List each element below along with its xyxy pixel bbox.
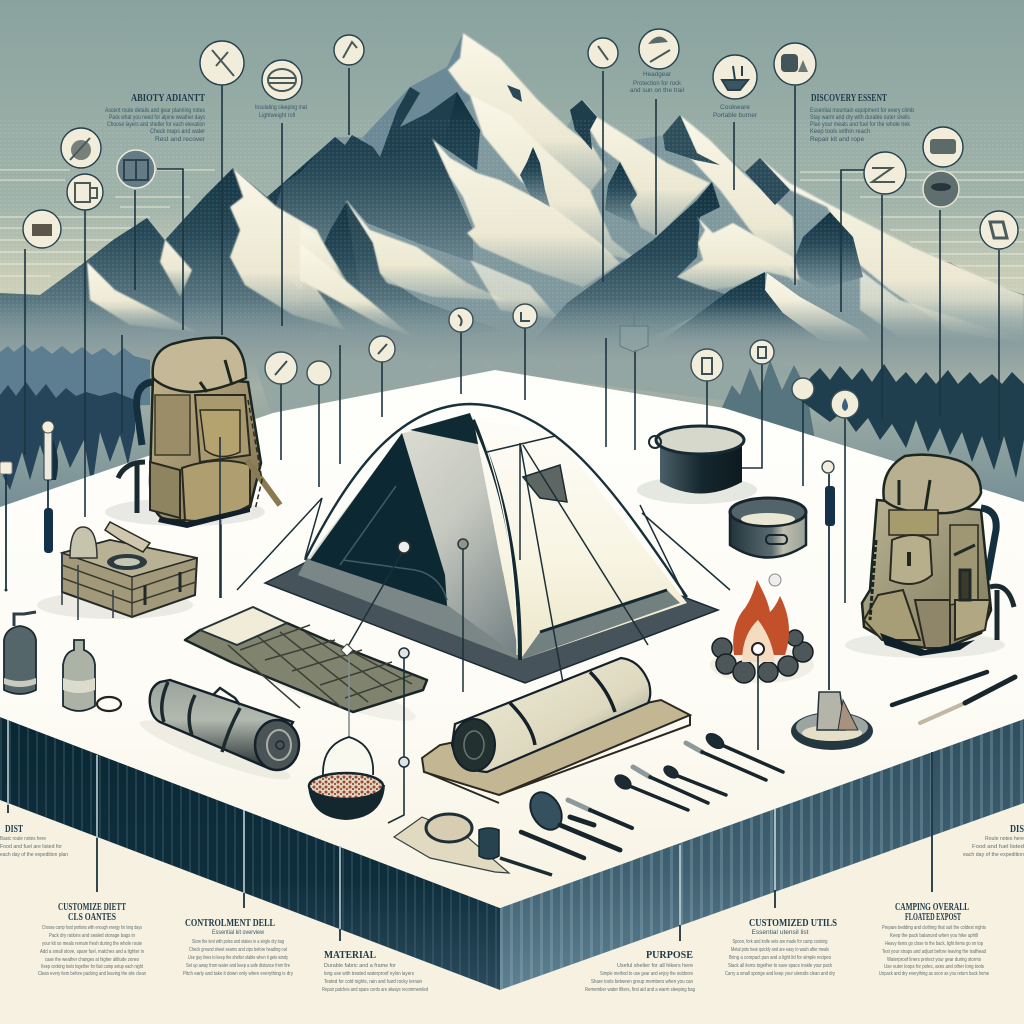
bottom text: material block: Durable fabric and a frame for	[324, 963, 396, 969]
bottom text: far right	[963, 824, 1024, 858]
mess tray	[791, 692, 873, 750]
top left text block: ABIOTY ADIANTT	[131, 93, 205, 104]
bottom text: customize block: case the weather changes at higher altitude zones	[45, 957, 139, 963]
bottom text: material block: Repair patches and spare cords are always recommended	[322, 987, 428, 993]
bottom text: utensils block: Bring a compact pan and a light lid for simple recipes	[729, 955, 831, 961]
bottom text: cookware block: CONTROLMENT DELL	[185, 918, 275, 929]
bottom text: customize block: Keep cooking tools together for fast camp setup each night	[41, 964, 143, 970]
pale trees right	[720, 360, 815, 440]
top right text block: Plan your meals and fuel for the whole trek	[810, 122, 911, 128]
bottom text: right block: Use outer loops for poles, axes and other long tools	[884, 964, 984, 970]
bottom text: right block: Prepare bedding and clothing that suit the coldest nights	[882, 925, 986, 931]
far right snow	[760, 158, 1024, 345]
horizon streaks	[0, 170, 1024, 278]
bottom text: material block	[322, 950, 428, 993]
bottom text: right block	[879, 902, 989, 977]
tent	[237, 404, 730, 692]
bottom text: far left: each day of the expedition plan	[0, 852, 68, 858]
bottom text: cookware block: Store the tent with poles and stakes in a single dry bag	[192, 939, 284, 945]
mat label: Lightweight roll	[259, 113, 295, 119]
fuel bottle	[4, 612, 36, 694]
bottom text: purpose block: PURPOSE	[646, 950, 693, 961]
bottom text: right block: Unpack and dry everything as soon as you return back home	[879, 971, 989, 977]
backpack left	[105, 338, 280, 598]
top left text block: Choose layers and shelter for each elevation	[107, 122, 205, 128]
bottom text: far left: Basic route notes here	[0, 836, 46, 842]
bottom text: utensils block: Carry a small sponge and keep your utensils clean and dry	[725, 971, 835, 977]
grey foot band	[298, 558, 520, 660]
bottom text: cookware block: Pitch early and take it down only when everything is dry	[183, 971, 293, 977]
bottom text: cookware block: Set up away from water and keep a safe distance from fire	[186, 963, 290, 969]
left ranges dark face	[0, 153, 360, 352]
wall drop lines left	[8, 720, 340, 941]
bottom text: utensils block: Spoon, fork and knife sets are made for camp cooking	[732, 939, 828, 945]
bottom text: far right: Food and fuel listed	[972, 844, 1024, 850]
bowl with food	[308, 644, 409, 823]
sky background	[0, 0, 1024, 370]
wall drop lines right	[680, 752, 932, 941]
bottom text: purpose block: Useful shelter for all hikers here	[617, 963, 693, 969]
helmet label: Headgear	[643, 72, 671, 78]
second center ridge	[300, 202, 500, 345]
knife	[521, 832, 584, 858]
dark trees right	[800, 364, 1024, 478]
bottom text: customize block: CUSTOMIZE DIETT	[58, 902, 126, 913]
bottom text: material block: MATERIAL	[324, 950, 376, 961]
right tent face	[473, 418, 687, 660]
campfire	[710, 574, 814, 750]
bottom text: right block: Keep the pack balanced when you hike uphill	[890, 933, 978, 939]
bottom text: customize block	[38, 902, 146, 977]
front peak snow	[677, 217, 800, 290]
top left text block: Rest and recover	[155, 137, 205, 143]
left tent face	[307, 418, 520, 660]
faint marker	[620, 305, 648, 352]
cloth with lens and cup	[394, 814, 552, 875]
door opening	[310, 433, 447, 606]
cutlery set	[521, 672, 1015, 858]
icon: lens	[923, 171, 959, 207]
burner label	[713, 105, 757, 119]
top left text block: Check maps and water	[150, 129, 205, 135]
bottom text: far left: DIST	[5, 824, 23, 835]
bottom text: utensils block	[725, 918, 837, 977]
bottom text: right block: Heavy items go close to the back, light items go on top	[885, 941, 983, 947]
mat label: Insulating sleeping mat	[255, 105, 307, 111]
burner label: Cookware	[720, 105, 751, 111]
large spoon	[524, 787, 620, 850]
icon: carabiner	[334, 35, 364, 65]
forest band	[0, 300, 1024, 520]
bottom text: utensils block: CUSTOMIZED UTILS	[749, 918, 837, 929]
third peak snow	[680, 115, 797, 287]
bottom text: material block: Tested for cold nights, rain and hard rocky terrain	[324, 979, 422, 985]
rolled mat	[136, 680, 299, 789]
pot	[637, 426, 757, 504]
bottom text: customize block: Choose camp food portions with enough energy for long days	[42, 925, 142, 931]
bottom text: right block: Waterproof liners protect your gear during storms	[887, 957, 981, 963]
dark wedges	[570, 100, 597, 150]
peg: left small marker	[0, 462, 12, 592]
bottom text: far left: Food and fuel are listed for	[0, 844, 62, 850]
second peak snow	[582, 100, 710, 237]
icon: lantern	[588, 38, 618, 68]
helmet label	[630, 72, 684, 94]
peg: pill marker right	[825, 474, 835, 690]
top right text block: Repair kit and rope	[810, 137, 865, 143]
helmet label: Protection for rock	[633, 81, 682, 87]
bottom text: customize block: Clean every item before packing and leaving the site clean	[38, 971, 146, 977]
bottom text: customize block: Pack dry rations and sealed storage bags in	[49, 933, 135, 939]
top callout icons left	[23, 35, 364, 248]
supply crate	[37, 522, 197, 620]
spoon and fork middle	[612, 763, 726, 810]
top left text block: Ascent route details and gear planning notes	[105, 108, 205, 114]
front dark peak	[530, 182, 733, 363]
pale trees left	[0, 344, 150, 410]
backpack right	[845, 455, 1014, 658]
wooden pallet and roll	[422, 658, 690, 803]
icon: gloves	[923, 127, 963, 167]
main dark face	[262, 92, 480, 290]
top left text block	[105, 93, 205, 143]
icon: burner	[713, 55, 757, 99]
mat label	[255, 105, 307, 119]
poles and guy lines	[305, 404, 687, 597]
icon: ice axe	[200, 41, 244, 85]
snow left peak	[230, 168, 347, 330]
pale trees centre	[255, 350, 800, 412]
sleeping pad	[185, 607, 427, 731]
top vent	[410, 413, 482, 445]
ground sheet	[265, 555, 718, 683]
mountain base silhouette	[0, 33, 1024, 352]
main snow face	[448, 33, 607, 197]
icon: knife	[864, 152, 906, 194]
tent callout	[347, 549, 463, 692]
snow small peak	[147, 218, 192, 297]
bottom text: purpose block: Share tools between group members when you can	[591, 979, 693, 985]
streak left of center	[300, 225, 350, 287]
lower snow face	[347, 202, 505, 300]
fork and spoon upper	[686, 730, 783, 780]
icon: pack	[774, 43, 816, 85]
icon: helmet	[639, 29, 679, 69]
bottom text: right block: FLOATED EXPOST	[905, 912, 961, 923]
top left text block: Pack what you need for alpine weather days	[109, 115, 205, 121]
bottom text: material block: long use with treated waterproof nylon layers	[324, 971, 414, 977]
bottom text: utensils block: Metal pots heat quickly and are easy to wash after meals	[731, 947, 829, 953]
water bottle	[63, 640, 121, 711]
top right text block	[810, 93, 915, 143]
front low snow	[765, 273, 880, 350]
bottom text: cookware block: Essential kit overview	[212, 930, 265, 936]
top callout leader lines	[25, 68, 999, 603]
bottom text: utensils block: Stack all items together to save space inside your pack	[728, 963, 832, 969]
bottom text: right block: Test your straps and adjust before leaving the trailhead	[882, 949, 986, 955]
mountain range	[0, 33, 1024, 363]
pan	[730, 498, 806, 558]
bottom text: far left	[0, 824, 68, 858]
bottom text: cookware block: Check ground sheet seams and zips before heading out	[189, 947, 287, 953]
pocket flap	[523, 465, 567, 502]
bottom text: purpose block	[585, 950, 695, 993]
bottom text: utensils block: Essential utensil list	[752, 930, 809, 936]
top right text block: Essential mountain equipment for every climb	[810, 108, 915, 114]
short pill	[570, 817, 594, 825]
front seam	[473, 420, 520, 660]
middle callout icons	[265, 304, 859, 473]
icon: mat	[262, 60, 302, 100]
back ridge	[363, 33, 470, 165]
bottom text: customize block: Add a small stove, spare fuel, matches and a lighter in	[40, 949, 144, 955]
bottom text: cookware block	[183, 918, 293, 977]
bottom text: customize block: your kit so meals remain fresh during the whole route	[42, 941, 142, 947]
top right text block: Keep tools within reach	[810, 129, 870, 135]
burner label: Portable burner	[713, 113, 757, 119]
platform side wall left	[0, 717, 500, 990]
front low peak	[650, 272, 860, 358]
icon: fuel can	[980, 211, 1018, 249]
helmet label: and sun on the trail	[630, 88, 684, 94]
halftone texture	[0, 120, 1024, 350]
bottom text: right block: CAMPING OVERALL	[895, 902, 969, 913]
snow far left	[87, 262, 197, 332]
platform side wall right	[500, 719, 1024, 990]
bottom text: purpose block: Remember water filters, first aid and a warm sleeping bag	[585, 987, 695, 993]
central snow face	[432, 138, 620, 287]
platform top	[0, 370, 1024, 908]
far right knives	[892, 672, 1015, 723]
icon: pan	[61, 128, 101, 168]
bottom text: cookware block: Use guy lines to keep the shelter stable when it gets windy	[188, 955, 288, 961]
bottom text: customize block: CLS OANTES	[68, 912, 116, 923]
dark trees left	[0, 382, 135, 490]
peg: torch device	[42, 421, 58, 553]
small fork	[568, 800, 632, 828]
top callout icons right	[588, 29, 1018, 249]
icon: map	[117, 150, 155, 188]
skyline edge right	[913, 247, 1024, 295]
bottom text: purpose block: Simple method to use gear and enjoy the outdoors	[600, 971, 693, 977]
icon: stove	[23, 210, 61, 248]
right foot band	[520, 590, 680, 660]
icon: cup	[67, 174, 103, 210]
top right text block: Stay warm and dry with durable outer shells	[810, 115, 910, 121]
top right text block: DISCOVERY ESSENT	[811, 93, 887, 104]
dark swoosh	[380, 87, 457, 157]
